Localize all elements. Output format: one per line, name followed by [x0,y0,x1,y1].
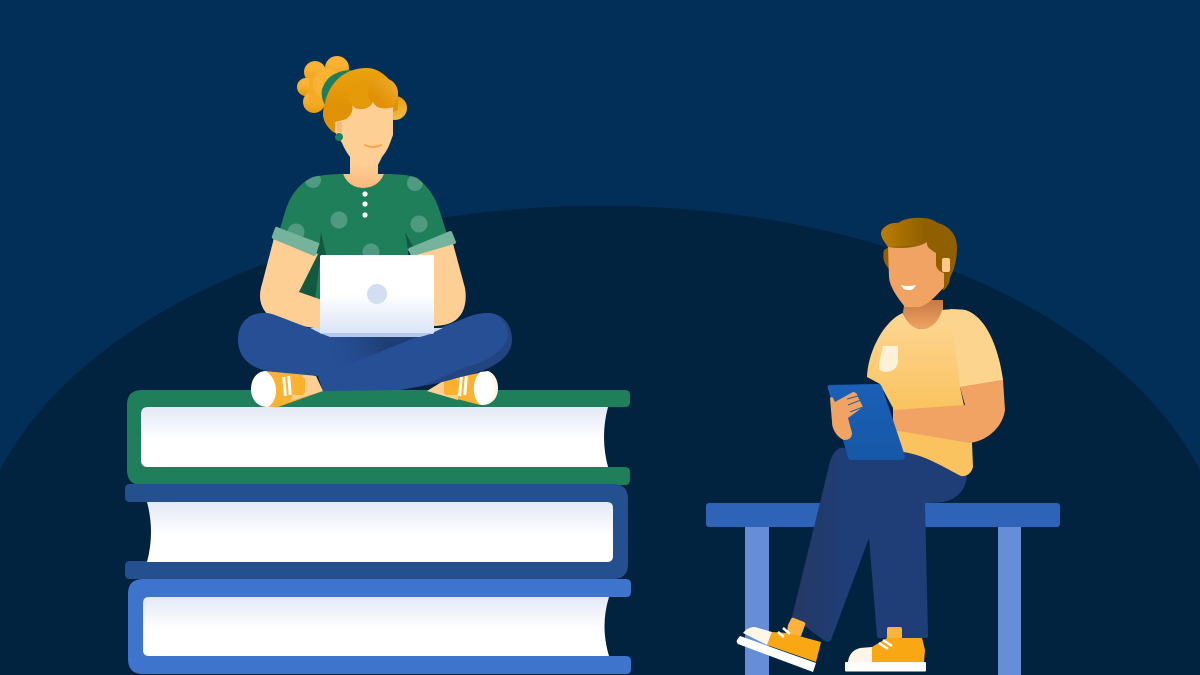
man's ear [942,258,950,272]
man's arm [893,380,1005,443]
dark shirt underside [299,232,330,300]
right arm [410,240,466,326]
left arm [260,238,325,330]
book: green [127,390,630,485]
book: navy [125,484,628,579]
front shoe [845,627,926,672]
stack of books [125,390,631,674]
hair bun [297,56,349,113]
hair [323,68,398,135]
man's face [888,242,944,307]
hand with finger lines [830,392,863,440]
book: blue [128,579,631,674]
woman with laptop [238,56,512,407]
tablet [828,384,905,460]
ear and earring [335,122,343,141]
shirt pocket [879,346,898,372]
right sleeve cuff [408,231,456,256]
trousers [792,448,967,642]
crossed legs [238,313,512,391]
laptop [310,255,443,337]
hair band [322,70,360,105]
man's neck [903,300,943,329]
back shoe [737,618,821,672]
hair right lobe [383,96,407,120]
hair lobes [348,78,398,108]
back hair [883,222,957,290]
face [335,102,393,165]
shoe left [251,371,323,407]
green polka-dot shirt [279,172,447,310]
background hill [0,206,1200,675]
neck with collar [343,150,384,188]
bench [706,503,1060,675]
smile [365,145,381,147]
yellow shirt [867,309,1003,476]
man's smile [901,285,916,290]
man with tablet [737,218,1005,672]
hair top [881,218,945,262]
shoe right [427,371,498,405]
left sleeve cuff [272,227,320,256]
